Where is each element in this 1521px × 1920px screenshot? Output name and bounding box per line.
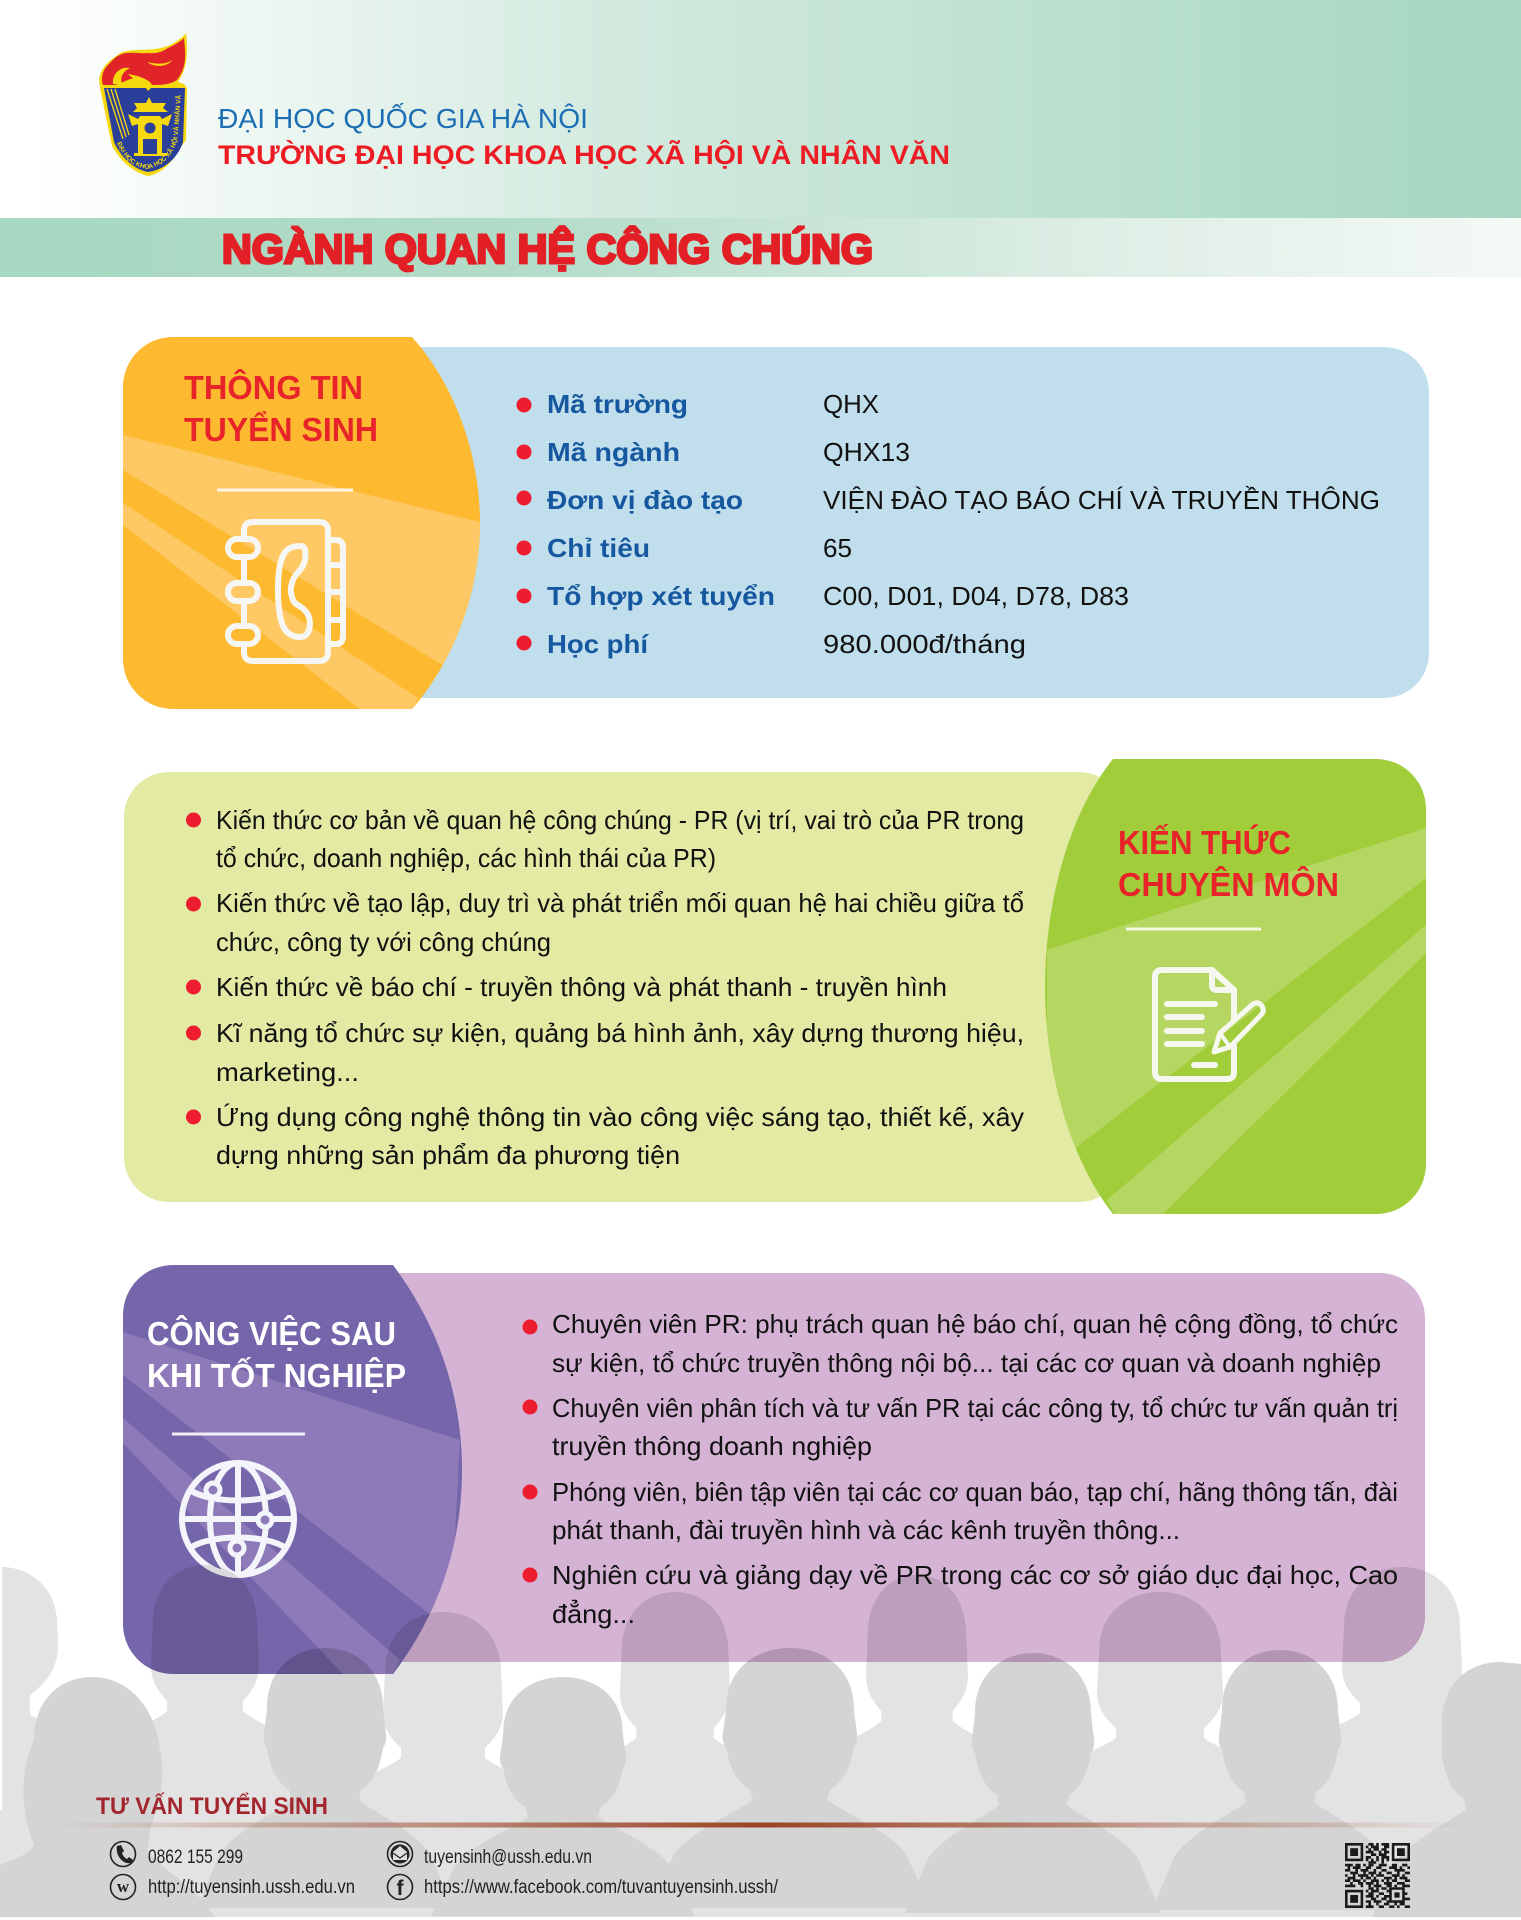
text list: professional knowledge: Kiến thức cơ bản về quan hệ công chúng - PR (vị trí, vai trò của PR trong [216,805,1024,835]
text list: admissions info [516,389,1380,659]
heading: careers: CÔNG VIỆC SAU [147,1314,396,1352]
text list: careers: Phóng viên, biên tập viên tại các cơ quan báo, tạp chí, hãng thông tấn, đài [552,1477,1398,1507]
text list: professional knowledge: dựng những sản phẩm đa phương tiện [216,1140,680,1170]
heading: admissions info [184,368,378,448]
title band [0,218,1521,277]
text list: professional knowledge: chức, công ty với công chúng [216,927,551,957]
text list: careers: sự kiện, tổ chức truyền thông nội bộ... tại các cơ quan và doanh nghiệp [552,1348,1381,1378]
text list: professional knowledge [186,805,1024,1170]
text list: careers: Nghiên cứu và giảng dạy về PR trong các cơ sở giáo dục đại học, Cao [552,1560,1398,1590]
header background [0,0,1521,218]
text list: admissions info: Mã ngành [547,437,680,467]
panel tab: admissions info [123,337,480,709]
text list: admissions info: Đơn vị đào tạo [547,485,743,515]
panel tab: professional knowledge [1045,759,1426,1214]
icon: phone book [228,522,343,661]
icon: facebook [388,1874,412,1900]
text list: admissions info: Chỉ tiêu [547,533,650,563]
heading: admissions info: TUYỂN SINH [184,411,378,448]
text list: admissions info: 980.000đ/tháng [823,629,1026,659]
text list: careers: Chuyên viên phân tích và tư vấn PR tại các công ty, tổ chức tư vấn quản trị [552,1393,1398,1423]
icon: website: w [117,1877,130,1896]
heading: professional knowledge: KIẾN THỨC [1118,824,1291,861]
heading: admissions info: THÔNG TIN [184,368,363,406]
heading: faculty name: TRƯỜNG ĐẠI HỌC KHOA HỌC XÃ HỘI VÀ NHÂN VĂN [218,139,950,170]
text list: careers: đẳng... [552,1598,635,1629]
text list: admissions info: 65 [823,533,852,563]
icon: document and pen [1155,970,1263,1079]
contact: website: http://tuyensinh.ussh.edu.vn [148,1877,355,1898]
text list: professional knowledge: Kiến thức về tạo lập, duy trì và phát triển mối quan hệ hai chiều giữa tổ [216,888,1024,918]
crowd silhouettes [0,1565,1521,1917]
heading: careers [147,1314,406,1394]
text list: professional knowledge: Kiến thức về báo chí - truyền thông và phát thanh - truyền hình [216,972,947,1002]
text list: admissions info: Tổ hợp xét tuyển [547,581,775,611]
panel tab: careers [123,1265,462,1674]
heading: professional knowledge [1118,824,1339,903]
icon: globe [182,1463,294,1575]
panel background: careers [300,1273,1425,1662]
icon: website [110,1874,136,1900]
QR code [1345,1844,1410,1907]
icon: phone [110,1842,136,1866]
panel background: professional knowledge [124,772,1124,1202]
text list: professional knowledge: marketing... [216,1057,359,1087]
panel background: admissions info [300,347,1429,698]
text list: admissions info: QHX13 [823,437,910,467]
text list: admissions info: VIỆN ĐÀO TẠO BÁO CHÍ VÀ TRUYỀN THÔNG [823,485,1380,515]
footer heading: TƯ VẤN TUYỂN SINH [96,1792,328,1820]
contact: email: tuyensinh@ussh.edu.vn [424,1847,592,1868]
icon: facebook: f [396,1877,404,1900]
text list: admissions info: C00, D01, D04, D78, D83 [823,581,1129,611]
heading: university name: ĐẠI HỌC QUỐC GIA HÀ NỘI [218,102,588,134]
icon: university logo [99,33,188,176]
icon: email [388,1842,412,1866]
heading: professional knowledge: CHUYÊN MÔN [1118,865,1339,903]
text list: careers: phát thanh, đài truyền hình và các kênh truyền thông... [552,1515,1180,1545]
footer rule [50,1822,1470,1828]
text list: careers: truyền thông doanh nghiệp [552,1431,872,1461]
text list: admissions info: QHX [823,389,879,419]
title: NGÀNH QUAN HỆ CÔNG CHÚNG [222,226,873,272]
text list: careers [522,1309,1398,1629]
heading: careers: KHI TỐT NGHIỆP [147,1356,406,1394]
contact: phone number: 0862 155 299 [148,1847,243,1868]
logo pavilion [128,97,172,156]
text list: professional knowledge: tổ chức, doanh nghiệp, các hình thái của PR) [216,843,716,873]
text list: careers: Chuyên viên PR: phụ trách quan hệ báo chí, quan hệ cộng đồng, tổ chức [552,1309,1398,1339]
text list: professional knowledge: Ứng dụng công nghệ thông tin vào công việc sáng tạo, thiết kế, xây [216,1102,1024,1132]
text list: admissions info: Mã trường [547,389,688,419]
text list: professional knowledge: Kĩ năng tổ chức sự kiện, quảng bá hình ảnh, xây dựng thương hiệu, [216,1018,1024,1048]
text list: admissions info: Học phí [547,629,649,659]
contact: facebook: https://www.facebook.com/tuvantuyensinh.ussh/ [424,1877,779,1898]
